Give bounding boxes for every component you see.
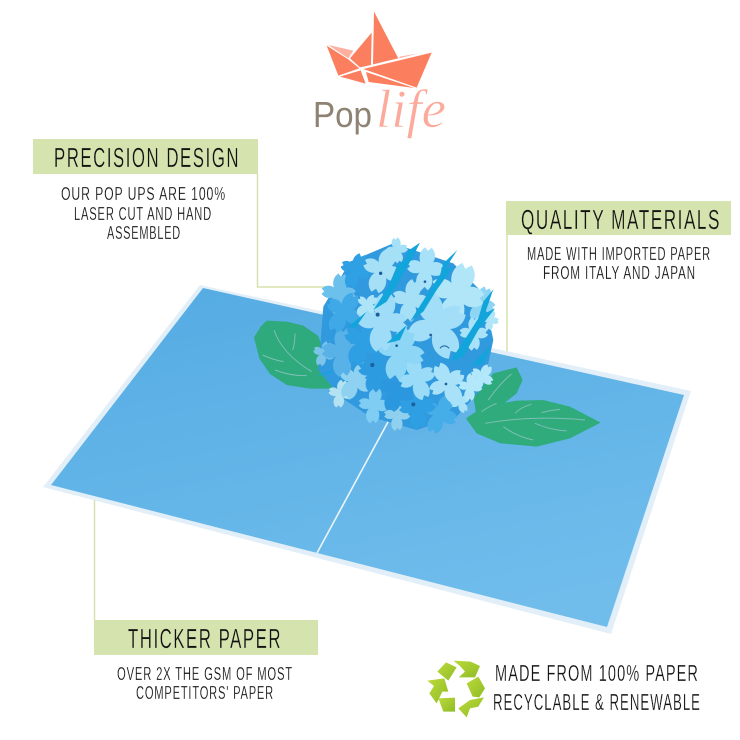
heading: THICKER PAPER — [128, 623, 282, 654]
card border — [43, 285, 691, 634]
description — [117, 664, 293, 703]
logo wordmark: Pop: Pop — [313, 94, 372, 135]
logo wordmark: life: life — [376, 79, 446, 139]
top row blossoms — [314, 237, 503, 368]
card panel — [51, 288, 684, 627]
hydrangea flower — [307, 237, 503, 442]
icon: recycle symbol — [427, 661, 485, 717]
description — [61, 184, 226, 243]
description — [527, 244, 711, 283]
petal cut-outs — [370, 272, 449, 406]
right leaves — [466, 367, 601, 447]
heading bar — [506, 201, 731, 235]
description: OUR POP UPS ARE 100% — [61, 184, 226, 204]
saturated petal slivers — [314, 243, 495, 377]
heading bar — [33, 139, 258, 174]
bottom row blossoms — [324, 353, 473, 442]
description: LASER CUT AND HAND — [74, 204, 212, 224]
logo: Poplife — [313, 12, 446, 139]
icon: origami boat — [327, 12, 432, 88]
description: OVER 2X THE GSM OF MOST — [117, 664, 293, 684]
callout: precision design — [33, 139, 330, 287]
heading bar — [94, 620, 318, 655]
description: COMPETITORS' PAPER — [136, 683, 274, 703]
middle row blossoms — [307, 310, 501, 412]
callout: thicker paper — [94, 498, 318, 703]
left leaf — [254, 321, 333, 389]
flower base — [318, 243, 493, 430]
fold line — [317, 420, 389, 553]
connector line — [506, 235, 508, 360]
description: ASSEMBLED — [107, 223, 181, 243]
pop-up card — [43, 237, 691, 634]
callout: quality materials — [506, 201, 731, 360]
recycling message — [427, 660, 701, 717]
connector line — [94, 498, 96, 620]
connector line — [258, 174, 330, 287]
heading: PRECISION DESIGN — [54, 142, 240, 173]
recycling text — [493, 660, 701, 715]
